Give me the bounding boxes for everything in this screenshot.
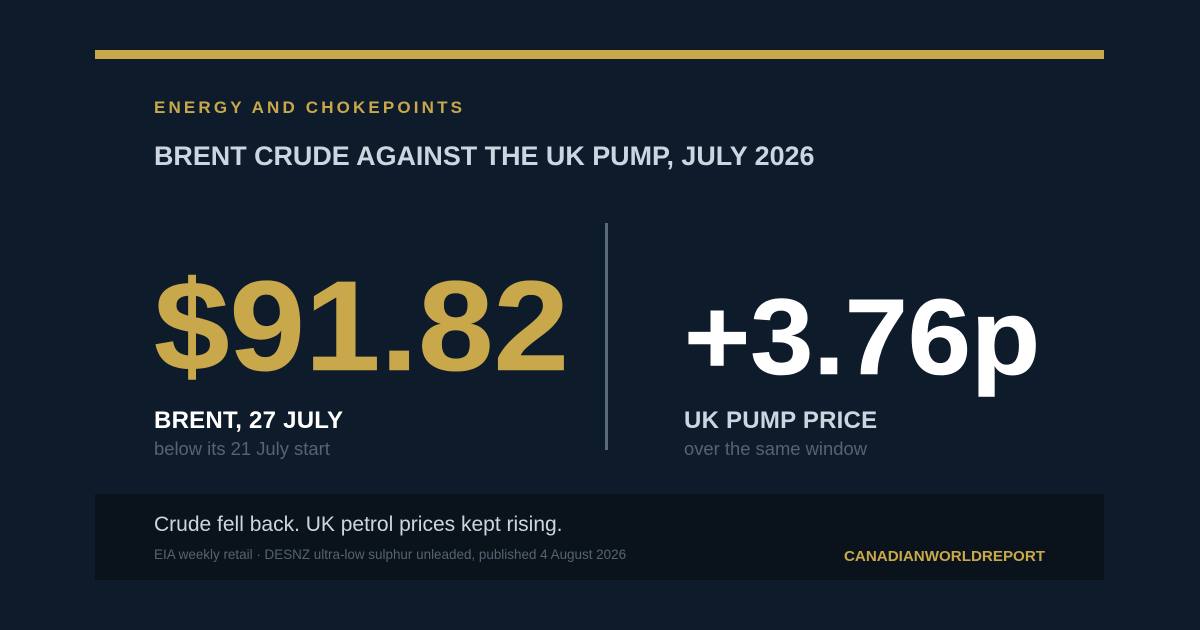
panel: footer band: [95, 494, 1104, 580]
brand name: CANADIANWORLDREPORT: [844, 548, 1045, 565]
panel: UK pump stat: [684, 276, 1040, 458]
source line: EIA weekly retail · DESNZ ultra-low sulphur unleaded, published 4 August 2026: [154, 546, 626, 562]
label: Brent date: BRENT, 27 JULY: [154, 407, 343, 434]
vertical divider: [605, 223, 608, 450]
big number: pump price change: +3.76p: [684, 276, 1040, 397]
big number: Brent price: $91.82: [154, 255, 569, 398]
note: Brent change: below its 21 July start: [154, 438, 330, 458]
note: same window: over the same window: [684, 438, 867, 458]
takeaway text: Crude fell back. UK petrol prices kept rising.: [154, 513, 563, 536]
top accent bar: [95, 50, 1104, 59]
eyebrow heading: ENERGY AND CHOKEPOINTS: [154, 98, 465, 117]
label: UK pump price: UK PUMP PRICE: [684, 407, 877, 434]
panel: Brent stat: [154, 255, 569, 459]
title: BRENT CRUDE AGAINST THE UK PUMP, JULY 2026: [154, 140, 814, 170]
